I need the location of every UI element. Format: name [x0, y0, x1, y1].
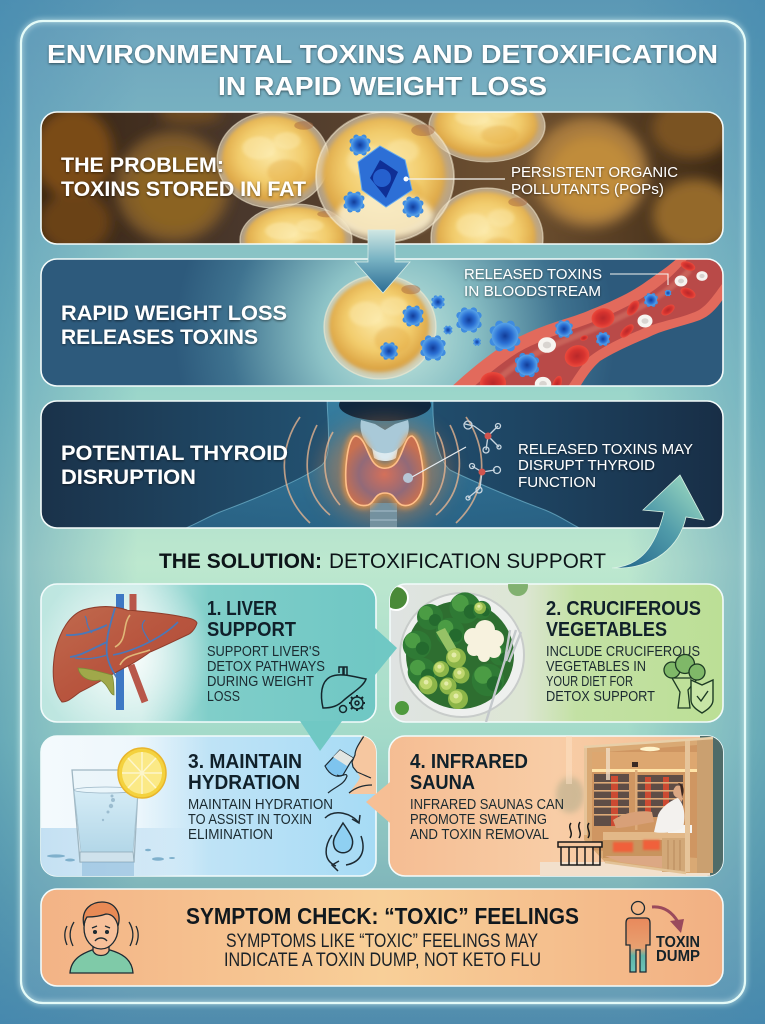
icon: water drop cycle	[325, 813, 363, 871]
heading: infrared sauna: SAUNA	[410, 772, 475, 794]
heading: potential thyroid disruption	[61, 442, 288, 489]
text: released toxins may disrupt thyroid function	[518, 441, 693, 491]
heading: liver support: 1. LIVER	[207, 598, 277, 620]
fork	[486, 630, 521, 722]
title	[47, 39, 718, 101]
heading: maintain hydration: HYDRATION	[188, 772, 300, 794]
card: 3 maintain hydration	[41, 736, 376, 876]
callout: persistent organic pollutants	[404, 164, 678, 198]
panel: rapid weight loss releases toxins	[41, 256, 730, 394]
panel: potential thyroid disruption	[41, 389, 723, 532]
callout: released toxins in bloodstream: IN BLOODSTREAM	[464, 283, 601, 300]
panel: symptom check	[41, 889, 723, 986]
woman in towel	[668, 825, 692, 833]
heading: cruciferous vegetables	[546, 598, 701, 641]
icon: toxin dump figure: TOXIN	[656, 934, 700, 951]
heading: the solution: DETOXIFICATION SUPPORT	[329, 550, 606, 573]
heading: rapid weight loss	[61, 302, 287, 349]
illustration: neck and thyroid	[186, 402, 580, 528]
text: symptom description: SYMPTOMS LIKE “TOXIC” FEELINGS MAY	[226, 931, 538, 952]
text: liver body: SUPPORT LIVER'S	[207, 643, 320, 660]
callout: persistent organic pollutants: POLLUTANTS (POPs)	[511, 181, 664, 198]
arrow: curved up to the solution	[612, 475, 704, 568]
cabin shell	[584, 740, 697, 873]
arrow: sauna pointing to hydration	[366, 782, 390, 823]
panel: the problem, toxins stored in fat	[40, 111, 724, 245]
card: 4 infrared sauna	[366, 736, 724, 876]
card: 2 cruciferous vegetables	[384, 576, 723, 722]
cauliflower	[464, 620, 504, 662]
text: hydration body: MAINTAIN HYDRATION	[188, 796, 333, 813]
heading: rapid weight loss: RAPID WEIGHT LOSS	[61, 302, 287, 325]
icon: toxin molecules	[464, 421, 501, 500]
heading: maintain hydration: 3. MAINTAIN	[188, 751, 302, 773]
heading: potential thyroid disruption: DISRUPTION	[61, 466, 196, 489]
infrared panels	[594, 770, 683, 830]
title: ENVIRONMENTAL TOXINS AND DETOXIFICATION	[47, 39, 718, 69]
text: cruciferous body	[546, 643, 700, 705]
text: released toxins may disrupt thyroid function: DISRUPT THYROID	[518, 457, 655, 474]
heading: rapid weight loss: RELEASES TOXINS	[61, 326, 258, 349]
text: cruciferous body: DETOX SUPPORT	[546, 688, 655, 705]
heading: the solution: THE SOLUTION:	[159, 550, 322, 573]
illustration: infrared sauna cabin	[540, 736, 724, 876]
text: cruciferous body: YOUR DIET FOR	[546, 673, 633, 690]
lemon slice	[118, 748, 166, 798]
text: liver body: DURING WEIGHT	[207, 673, 314, 690]
arrow: liver to hydration	[300, 721, 342, 751]
illustration: glass of water with lemon	[41, 748, 191, 876]
title: IN RAPID WEIGHT LOSS	[218, 71, 547, 101]
heading: liver support	[207, 598, 296, 641]
text: liver body: LOSS	[207, 688, 240, 705]
callout line to gland	[412, 447, 466, 477]
text: hydration body: TO ASSIST IN TOXIN	[188, 811, 312, 828]
text: hydration body: ELIMINATION	[188, 826, 273, 843]
text: sauna body	[410, 796, 564, 843]
illustration: liver	[53, 594, 197, 710]
heading: the solution	[159, 550, 606, 573]
text: sauna body: PROMOTE SWEATING	[410, 811, 547, 828]
heading: cruciferous vegetables: 2. CRUCIFEROUS	[546, 598, 701, 620]
arrow: liver to vegetables	[375, 628, 397, 675]
heading: maintain hydration	[188, 751, 302, 794]
text: symptom description	[224, 931, 541, 971]
text: hydration body	[188, 796, 333, 843]
icon: toxin dump figure: DUMP	[656, 948, 700, 965]
icon: broccoli with shield	[664, 654, 713, 713]
heading: symptom check: SYMPTOM CHECK: “TOXIC” FEELINGS	[186, 903, 579, 929]
icon: thyroid gland	[346, 436, 423, 506]
heading: infrared sauna: 4. INFRARED	[410, 751, 528, 773]
text: sauna body: INFRARED SAUNAS CAN	[410, 796, 564, 813]
icon: person drinking	[325, 736, 376, 794]
icon: large toxin crystal	[358, 146, 412, 207]
heading: the problem	[61, 154, 306, 201]
illustration: fat cells with toxins	[42, 112, 722, 244]
arrow: fat cell down to weight loss	[355, 230, 410, 293]
heading: the problem: TOXINS STORED IN FAT	[61, 178, 306, 201]
callout: released toxins in bloodstream: RELEASED TOXINS	[464, 266, 602, 283]
heading: cruciferous vegetables: VEGETABLES	[546, 619, 667, 641]
heading: the problem: THE PROBLEM:	[61, 154, 224, 177]
heading: potential thyroid disruption: POTENTIAL THYROID	[61, 442, 288, 465]
icon: toxin dump figure	[626, 902, 700, 972]
posts	[584, 747, 587, 835]
callout: persistent organic pollutants: PERSISTENT ORGANIC	[511, 164, 678, 181]
illustration: shrinking fat cell and blood vessel	[323, 260, 722, 386]
text: cruciferous body: INCLUDE CRUCIFEROUS	[546, 643, 700, 660]
heading: liver support: SUPPORT	[207, 619, 296, 641]
callout: released toxins in bloodstream	[464, 266, 668, 300]
heading: infrared sauna	[410, 751, 528, 794]
icon: liver with gears	[321, 667, 366, 712]
text: cruciferous body: VEGETABLES IN	[546, 658, 646, 675]
icon: steam tub	[558, 822, 602, 865]
text: released toxins may disrupt thyroid function: RELEASED TOXINS MAY	[518, 441, 693, 458]
text: symptom description: INDICATE A TOXIN DUMP, NOT KETO FLU	[224, 950, 541, 971]
illustration: bowl of vegetables	[384, 576, 528, 722]
text: liver body: DETOX PATHWAYS	[207, 658, 325, 675]
text: sauna body: AND TOXIN REMOVAL	[410, 826, 549, 843]
card: 1 liver support	[41, 584, 397, 751]
text: liver body	[207, 643, 325, 705]
text: released toxins may disrupt thyroid function: FUNCTION	[518, 474, 596, 491]
bench and lights	[603, 832, 687, 840]
icon: unwell person	[65, 902, 138, 973]
